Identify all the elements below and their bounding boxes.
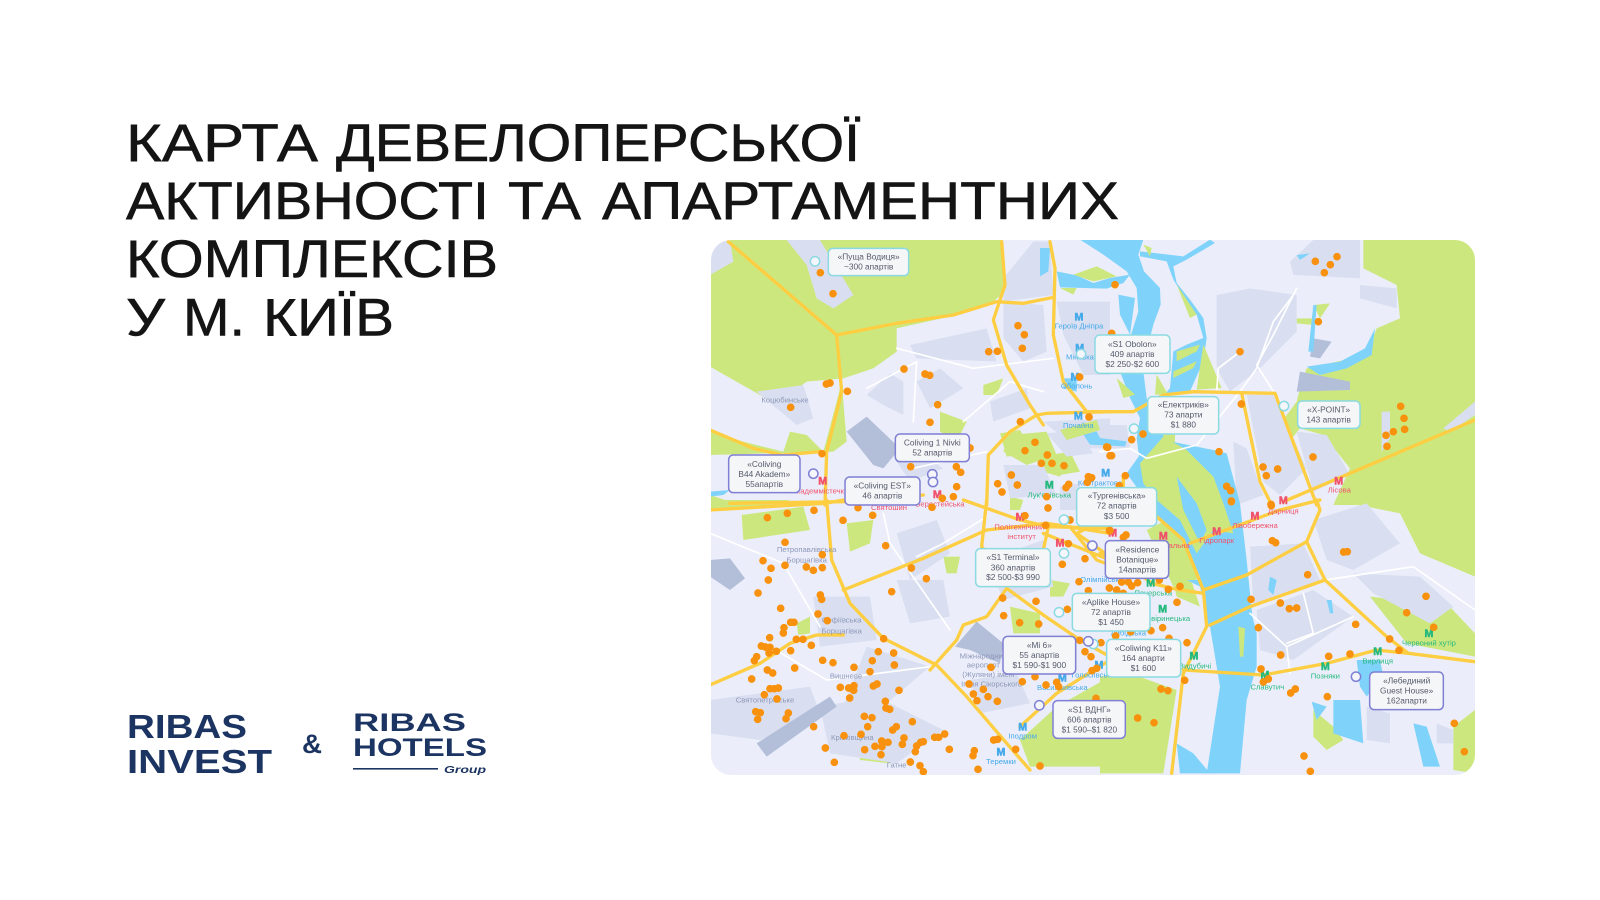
main roads bbox=[710, 242, 1475, 773]
title: КАРТА bbox=[126, 114, 319, 173]
metro stations and place names: Іподром bbox=[1008, 732, 1037, 741]
metro stations and place names: M bbox=[1018, 721, 1027, 733]
metro stations and place names: Софіївська bbox=[822, 616, 862, 625]
metro stations and place names: Політехнічний bbox=[994, 523, 1044, 532]
title: АКТИВНОСТІ bbox=[126, 172, 489, 231]
map of Kyiv bbox=[710, 240, 1475, 775]
logo: Ribas Invest: INVEST bbox=[127, 743, 272, 780]
logo: Ribas Hotels Group: RIBAS bbox=[353, 709, 466, 737]
label: Aplike House: $1 450 bbox=[1098, 617, 1124, 627]
logo: Ribas Hotels Group bbox=[353, 709, 487, 776]
metro stations and place names: Оболонь bbox=[1061, 382, 1092, 391]
metro stations and place names: Святопетрівське bbox=[736, 696, 794, 705]
metro stations and place names: Святошин bbox=[871, 503, 907, 512]
title: М. bbox=[183, 288, 245, 348]
metro stations and place names: M bbox=[1058, 672, 1067, 684]
label: Coliving EST bbox=[845, 477, 920, 505]
label: S1 ВДНГ: 606 апартів bbox=[1067, 714, 1112, 724]
metro stations and place names: M bbox=[1075, 342, 1084, 354]
metro stations and place names: M bbox=[1095, 660, 1104, 672]
metro stations and place names: M bbox=[1071, 371, 1080, 383]
metro stations and place names: M bbox=[1146, 578, 1155, 590]
label: Пуща Водиця bbox=[828, 248, 909, 276]
metro stations and place names: M bbox=[1425, 628, 1434, 640]
metro stations and place names: M bbox=[1279, 495, 1288, 507]
label: S1 Obolon: 409 апартів bbox=[1110, 349, 1155, 359]
metro stations and place names: M bbox=[1251, 510, 1260, 522]
label: X-POINT bbox=[1298, 401, 1360, 428]
title: КОМПЛЕКСІВ bbox=[126, 230, 498, 289]
label: Aplike House: «Aplike House» bbox=[1082, 597, 1141, 607]
label: Coliving 1 Nivki: 52 апартів bbox=[912, 448, 953, 458]
label: Residence Botanique: 14апартів bbox=[1119, 564, 1157, 574]
label: X-POINT: 143 апартів bbox=[1306, 414, 1351, 424]
metro stations and place names: M bbox=[997, 746, 1006, 758]
metro stations and place names: M bbox=[1158, 603, 1167, 615]
label: Лебединий Guest House: 162апарти bbox=[1386, 696, 1427, 706]
metro stations and place names: Петропавлівська bbox=[777, 545, 837, 554]
label: S1 ВДНГ: «S1 ВДНГ» bbox=[1068, 704, 1111, 714]
metro stations and place names: Коцюбинське bbox=[761, 396, 809, 405]
label: Лебединий Guest House bbox=[1370, 672, 1443, 710]
metro stations and place names: Голосіївська bbox=[1071, 671, 1116, 680]
metro stations and place names: Славутич bbox=[1250, 682, 1284, 691]
logo: Ribas Invest bbox=[127, 708, 272, 780]
metro stations and place names: M bbox=[818, 476, 827, 488]
metro stations and place names: Мінська bbox=[1066, 352, 1095, 361]
label: Пуща Водиця: «Пуща Водиця» bbox=[838, 251, 900, 261]
metro stations and place names: Міжнародний bbox=[960, 651, 1007, 660]
title: ТА bbox=[508, 172, 582, 231]
label: Coliving B44 Akadem: 55апартів bbox=[746, 479, 784, 489]
label: Mi 6: «Mi 6» bbox=[1027, 640, 1052, 650]
metro stations and place names: Лівобережна bbox=[1232, 521, 1279, 530]
metro stations and place names: Звіринецька bbox=[1147, 614, 1191, 623]
metro stations and place names: Видубичі bbox=[1179, 662, 1211, 671]
city blocks bbox=[710, 240, 1453, 763]
label: Residence Botanique: «Residence bbox=[1115, 544, 1160, 554]
logo: Ribas Hotels Group: HOTELS bbox=[353, 734, 487, 762]
metro stations and place names: M bbox=[1045, 480, 1054, 492]
label: Coliving B44 Akadem: «Coliving bbox=[747, 459, 782, 469]
label: Тургенівська: 72 апартів bbox=[1097, 500, 1137, 510]
logo: Ribas Hotels Group: Group bbox=[444, 764, 487, 776]
label: Пуща Водиця: ~300 апартів bbox=[844, 262, 894, 272]
metro stations and place names: Вишневе bbox=[830, 672, 862, 681]
label: S1 Terminal: $2 500-$3 990 bbox=[986, 572, 1040, 582]
metro stations and place names: Лук'янівська bbox=[1028, 490, 1072, 499]
project location markers bbox=[809, 257, 1361, 710]
label: Електриків bbox=[1148, 397, 1219, 434]
label: S1 ВДНГ: $1 590–$1 820 bbox=[1062, 724, 1117, 734]
metro stations and place names: M bbox=[1373, 646, 1382, 658]
label: Лебединий Guest House: Guest House» bbox=[1380, 686, 1434, 696]
metro stations and place names: Крюківщина bbox=[831, 733, 874, 742]
metro stations and place names: Олімпійська bbox=[1080, 575, 1124, 584]
label: S1 Terminal bbox=[976, 549, 1050, 587]
metro stations and place names: Теремки bbox=[986, 757, 1016, 766]
metro stations and place names: M bbox=[1261, 669, 1270, 681]
metro stations and place names: M bbox=[1056, 538, 1065, 550]
map base bbox=[711, 240, 1475, 775]
metro stations and place names: (Жуляни) імені bbox=[962, 670, 1015, 679]
title bbox=[126, 114, 1119, 348]
label: X-POINT: «X-POINT» bbox=[1307, 404, 1351, 414]
label: S1 Obolon bbox=[1095, 335, 1170, 373]
ampersand: & bbox=[302, 729, 322, 759]
metro stations and place names: Арсенальна bbox=[1147, 541, 1191, 550]
title: У bbox=[126, 288, 165, 348]
label: Mi 6: $1 590-$1 900 bbox=[1012, 660, 1067, 670]
metro stations and place names: аеропорт bbox=[967, 661, 1000, 670]
label: Mi 6: 55 апартів bbox=[1019, 650, 1060, 660]
metro stations and place names: Почайна bbox=[1063, 421, 1094, 430]
label: Тургенівська: $3 500 bbox=[1104, 511, 1130, 521]
logo: Ribas Invest: RIBAS bbox=[127, 708, 247, 745]
metro stations and place names: Героїв Дніпра bbox=[1055, 322, 1104, 331]
metro stations and place names: Васильківська bbox=[1037, 683, 1088, 692]
metro stations and place names: Дарниця bbox=[1268, 507, 1299, 516]
label: Coliving EST: «Coliving EST» bbox=[854, 481, 911, 491]
development activity dots bbox=[752, 257, 1464, 772]
metro stations and place names: M bbox=[1075, 311, 1084, 323]
metro stations and place names: Борщагівка bbox=[786, 556, 828, 565]
label: Coliving EST: 46 апартів bbox=[862, 491, 903, 501]
label: Тургенівська: «Тургенівська» bbox=[1088, 490, 1146, 500]
label: Лебединий Guest House: «Лебединий bbox=[1383, 676, 1431, 686]
metro stations and place names: M bbox=[1101, 467, 1110, 479]
label: Mi 6 bbox=[1003, 636, 1076, 674]
river Dnipro and lakes bbox=[710, 240, 1440, 773]
label: Тургенівська bbox=[1077, 488, 1157, 526]
label: Електриків: $1 880 bbox=[1171, 420, 1196, 430]
label: Coliving B44 Akadem bbox=[729, 455, 800, 493]
metro stations and place names: Ігоря Сікорського bbox=[961, 679, 1022, 688]
label: S1 Obolon: «S1 Obolon» bbox=[1108, 339, 1157, 349]
label: Coliwing K11: «Coliwing K11» bbox=[1115, 643, 1172, 653]
label: S1 Terminal: «S1 Terminal» bbox=[986, 552, 1040, 562]
forests and parks bbox=[710, 240, 1475, 773]
metro stations and place names bbox=[736, 311, 1456, 770]
label: Residence Botanique bbox=[1105, 541, 1169, 578]
label: Aplike House bbox=[1072, 593, 1150, 631]
metro stations and place names: Позняки bbox=[1311, 672, 1340, 681]
metro stations and place names: Лісова bbox=[1328, 485, 1352, 494]
label: Електриків: «Електриків» bbox=[1158, 400, 1209, 410]
title: ДЕВЕЛОПЕРСЬКОЇ bbox=[336, 114, 860, 173]
metro stations and place names: Гідропарк bbox=[1199, 536, 1235, 545]
metro stations and place names: M bbox=[1190, 650, 1199, 662]
metro stations and place names: M bbox=[1108, 528, 1117, 540]
metro stations and place names: Берестейська bbox=[915, 500, 965, 509]
title: АПАРТАМЕНТНИХ bbox=[602, 172, 1119, 231]
minor roads bbox=[710, 288, 1475, 680]
metro stations and place names: M bbox=[1159, 530, 1168, 542]
label: Електриків: 73 апарти bbox=[1164, 410, 1203, 420]
label: Coliving 1 Nivki bbox=[895, 434, 969, 462]
label: Coliving B44 Akadem: B44 Akadem» bbox=[738, 469, 791, 479]
label: S1 ВДНГ bbox=[1053, 701, 1125, 738]
metro stations and place names: M bbox=[1321, 661, 1330, 673]
metro stations and place names: Червоний хутір bbox=[1402, 638, 1456, 647]
metro stations and place names: Академмістечко bbox=[792, 486, 848, 495]
metro stations and place names: Печерська bbox=[1135, 588, 1173, 597]
metro stations and place names: інститут bbox=[1007, 532, 1036, 541]
label: Coliwing K11: $1 600 bbox=[1131, 663, 1156, 673]
label: Residence Botanique: Botanique» bbox=[1116, 554, 1159, 564]
metro stations and place names: M bbox=[1212, 526, 1221, 538]
label: Coliwing K11 bbox=[1107, 639, 1181, 677]
metro stations and place names: M bbox=[1334, 475, 1343, 487]
label: S1 Terminal: 360 апартів bbox=[991, 562, 1036, 572]
title: КИЇВ bbox=[263, 288, 394, 348]
metro stations and place names: Гатне bbox=[887, 761, 907, 770]
metro stations and place names: Борщагівка bbox=[821, 626, 863, 635]
metro stations and place names: M bbox=[1074, 411, 1083, 423]
label: Aplike House: 72 апартів bbox=[1091, 607, 1132, 617]
metro stations and place names: M bbox=[933, 489, 942, 501]
metro stations and place names: Контрактова bbox=[1078, 479, 1123, 488]
metro stations and place names: Либідська bbox=[1111, 629, 1147, 638]
metro stations and place names: Вирлиця bbox=[1362, 657, 1393, 666]
label: Coliving 1 Nivki: Coliving 1 Nivki bbox=[904, 438, 961, 448]
label: Coliwing K11: 164 апарти bbox=[1122, 653, 1165, 663]
metro stations and place names: M bbox=[1016, 512, 1025, 524]
label: S1 Obolon: $2 250-$2 600 bbox=[1105, 359, 1160, 369]
